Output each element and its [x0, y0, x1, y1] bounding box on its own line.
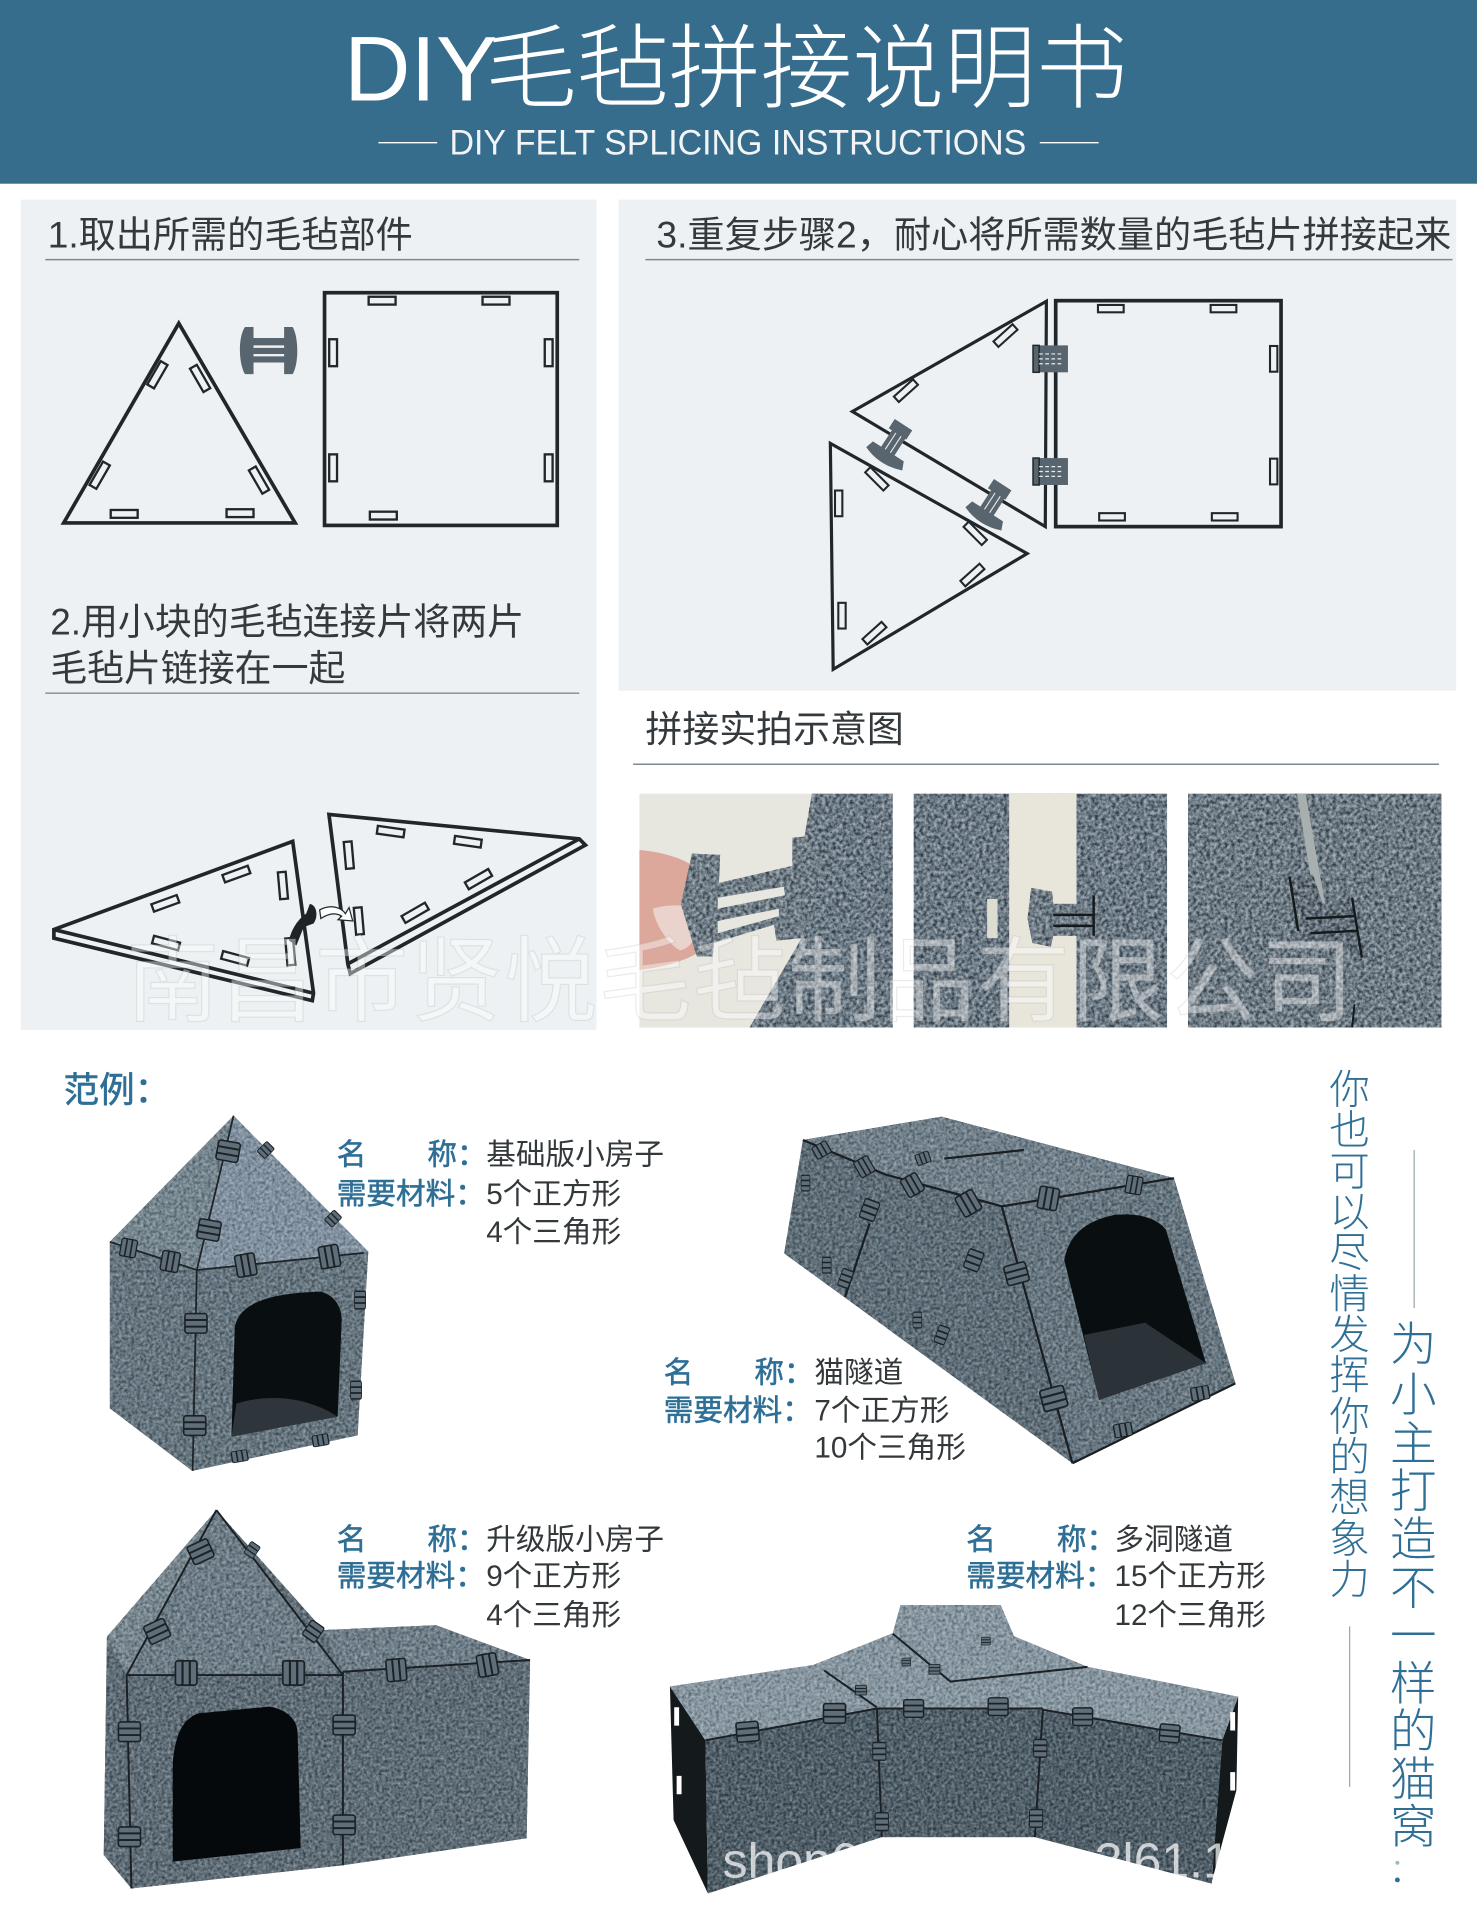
label: multi-hole tunnel: 12个三角形 — [1114, 1599, 1266, 1632]
heading: photo section: 拼接实拍示意图 — [645, 709, 904, 750]
vertical slogan: use your imagination: 象 — [1329, 1516, 1370, 1562]
vertical slogan: use your imagination: 尽 — [1329, 1229, 1370, 1275]
subtitle: DIY FELT SPLICING INSTRUCTIONS — [449, 122, 1026, 162]
vertical slogan: use your imagination — [1329, 1066, 1370, 1787]
label: cat tunnel — [664, 1357, 966, 1464]
label: basic house: 基础版小房子 — [486, 1139, 664, 1172]
photo: connector fully inserted — [1188, 794, 1441, 1028]
vertical slogan: build a unique cat nest: 不 — [1390, 1562, 1437, 1614]
vertical slogan: build a unique cat nest: 为 — [1390, 1319, 1437, 1371]
label: multi-hole tunnel: 名 — [966, 1523, 996, 1556]
door — [1064, 1214, 1206, 1400]
felt body — [784, 1117, 1235, 1463]
label: upgraded house: 名 — [337, 1523, 366, 1556]
vertical slogan: use your imagination: 以 — [1329, 1189, 1370, 1235]
example: multi-hole tunnel — [670, 1605, 1238, 1893]
watermark: company name: 南昌市贤悦毛毡制品有限公司 — [126, 930, 1353, 1034]
icon: connector being inserted — [289, 904, 316, 945]
door — [173, 1707, 301, 1862]
example: basic house — [110, 1116, 368, 1471]
vertical slogan: use your imagination: 可 — [1329, 1149, 1370, 1195]
vertical slogan: build a unique cat nest: 小 — [1390, 1369, 1437, 1421]
finger — [639, 850, 702, 970]
label: basic house: 需要材料： — [337, 1178, 485, 1211]
label: basic house: 5个正方形 — [486, 1178, 621, 1211]
title: DIY — [344, 18, 497, 120]
diagram: two triangles being linked — [54, 814, 585, 1001]
label: upgraded house: 升级版小房子 — [486, 1523, 664, 1556]
icon: felt square — [325, 293, 557, 525]
watermark: shop id: shop694651 24o3l61.1 — [723, 1835, 1231, 1889]
connector tabs — [736, 1637, 1180, 1830]
vertical slogan: use your imagination: 力 — [1329, 1556, 1370, 1602]
vertical slogan: use your imagination: 的 — [1329, 1434, 1370, 1480]
label: basic house — [337, 1139, 664, 1249]
heading: step 3: 3.重复步骤2，耐心将所需数量的毛毡片拼接起来 — [656, 214, 1451, 255]
example: cat tunnel — [784, 1117, 1235, 1463]
door — [231, 1292, 342, 1437]
label: upgraded house: 需要材料： — [337, 1560, 485, 1593]
vertical slogan: use your imagination: 挥 — [1329, 1352, 1370, 1398]
label: upgraded house: 9个正方形 — [486, 1560, 621, 1593]
felt body — [104, 1510, 530, 1889]
connector tabs — [119, 1140, 366, 1463]
dark inner sides — [670, 1686, 1238, 1893]
vertical slogan: use your imagination: 情 — [1329, 1271, 1370, 1317]
label: cat tunnel: 10个三角形 — [814, 1431, 966, 1464]
vertical slogan: build a unique cat nest: 打 — [1390, 1466, 1437, 1518]
vertical slogan: build a unique cat nest: 窝 — [1390, 1801, 1437, 1853]
vertical slogan: build a unique cat nest: 样 — [1390, 1658, 1437, 1710]
panel: steps 1 and 2 — [21, 200, 596, 1030]
label: multi-hole tunnel — [966, 1523, 1266, 1632]
example: upgraded house — [104, 1510, 530, 1889]
title: 毛毡拼接说明书 — [485, 18, 1128, 120]
heading: step 1: 1.取出所需的毛毡部件 — [48, 214, 413, 255]
felt body — [670, 1605, 1238, 1893]
label: multi-hole tunnel: 称： — [1057, 1523, 1116, 1556]
label: upgraded house: 4个三角形 — [486, 1599, 621, 1632]
vertical slogan: use your imagination: 你 — [1329, 1066, 1370, 1112]
label: upgraded house: 称： — [427, 1523, 487, 1556]
label: basic house: 名 — [337, 1139, 366, 1172]
photo: connector half inserted — [914, 794, 1167, 1028]
vertical slogan: use your imagination: 你 — [1329, 1393, 1370, 1439]
vertical slogan: build a unique cat nest — [1390, 1150, 1437, 1882]
label: cat tunnel: 称： — [754, 1357, 814, 1390]
label: upgraded house — [337, 1523, 664, 1632]
vertical slogan: use your imagination: 想 — [1329, 1474, 1370, 1520]
label: cat tunnel: 需要材料： — [664, 1395, 812, 1428]
arrow — [320, 907, 353, 921]
connector tabs — [118, 1538, 499, 1847]
vertical slogan: build a unique cat nest: 的 — [1390, 1706, 1437, 1758]
vertical slogan: build a unique cat nest: 主 — [1390, 1418, 1437, 1470]
icon: felt triangle — [64, 323, 295, 523]
felt body — [110, 1116, 368, 1471]
vertical slogan: build a unique cat nest: 一 — [1390, 1610, 1437, 1662]
vertical slogan: use your imagination: 也 — [1329, 1107, 1370, 1153]
photo: connector held by hand — [639, 794, 893, 1028]
side slots — [674, 1707, 1235, 1794]
diagram: pieces spliced — [830, 301, 1281, 669]
heading: step 2: 2.用小块的毛毡连接片将两片 — [50, 601, 524, 642]
label: multi-hole tunnel: 需要材料： — [966, 1560, 1114, 1593]
label: multi-hole tunnel: 多洞隧道 — [1114, 1523, 1233, 1556]
panel: step 3 — [618, 200, 1456, 691]
vertical slogan: use your imagination: 发 — [1329, 1311, 1370, 1357]
vertical slogan: build a unique cat nest: 造 — [1390, 1513, 1437, 1565]
label: basic house: 称： — [427, 1139, 487, 1172]
label: cat tunnel: 名 — [664, 1357, 693, 1390]
heading: step 2: 毛毡片链接在一起 — [50, 648, 345, 689]
label: cat tunnel: 猫隧道 — [814, 1357, 903, 1390]
vertical slogan: build a unique cat nest: 猫 — [1390, 1753, 1437, 1805]
icon: felt connector — [240, 327, 297, 374]
label: cat tunnel: 7个正方形 — [814, 1395, 949, 1428]
connector tabs — [801, 1140, 1210, 1438]
header banner — [0, 0, 1477, 184]
heading: examples: 范例： — [64, 1070, 170, 1110]
label: multi-hole tunnel: 15个正方形 — [1114, 1560, 1266, 1593]
label: basic house: 4个三角形 — [486, 1216, 621, 1249]
